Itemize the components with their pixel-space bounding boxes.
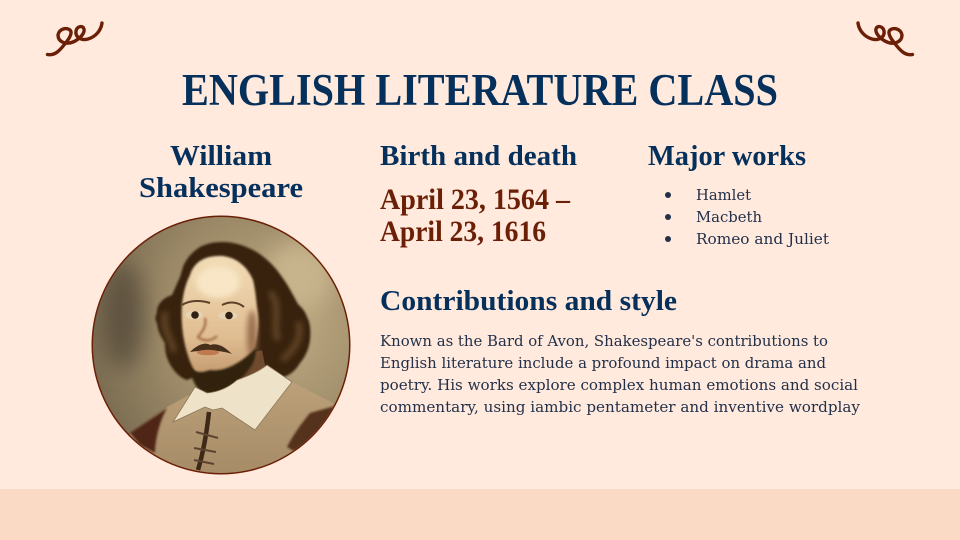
beard xyxy=(190,348,256,394)
heading: Contributions and style: Contributions and style xyxy=(380,285,677,317)
shoulders xyxy=(130,382,334,473)
eyes and brows xyxy=(182,301,210,305)
paragraph: contributions: poetry. His works explore complex human emotions and social xyxy=(380,378,858,394)
hair xyxy=(156,242,310,380)
bottom band xyxy=(0,489,960,540)
icon: left flourish xyxy=(48,23,102,55)
neck xyxy=(208,350,265,392)
list: major works xyxy=(665,188,829,248)
heading: William Shakespeare xyxy=(139,140,303,204)
dates: April 23, 1564 – xyxy=(380,183,571,216)
lacing xyxy=(198,412,209,470)
collar xyxy=(173,365,292,430)
dates xyxy=(380,183,571,248)
dates: April 23, 1616 xyxy=(380,215,546,248)
heading: Birth and death: Birth and death xyxy=(380,140,577,172)
paragraph: contributions: English literature include a profound impact on drama and xyxy=(380,356,826,372)
heading: William Shakespeare: William xyxy=(170,140,272,172)
paragraph: contributions: Known as the Bard of Avon, Shakespeare's contributions to xyxy=(380,334,828,350)
list: major works: Romeo and Juliet xyxy=(696,232,829,248)
paragraph: contributions xyxy=(380,334,861,416)
paragraph: contributions: commentary, using iambic pentameter and inventive wordplay xyxy=(380,400,861,416)
icon: right flourish xyxy=(858,23,912,55)
list: major works: Macbeth xyxy=(696,210,762,226)
heading: Major works: Major works xyxy=(648,140,806,172)
portrait: William Shakespeare xyxy=(90,215,352,480)
heading: William Shakespeare: Shakespeare xyxy=(139,172,303,204)
face xyxy=(182,256,258,391)
title: ENGLISH LITERATURE CLASS xyxy=(182,65,778,115)
nose xyxy=(198,318,217,340)
list: major works: Hamlet xyxy=(696,188,751,204)
